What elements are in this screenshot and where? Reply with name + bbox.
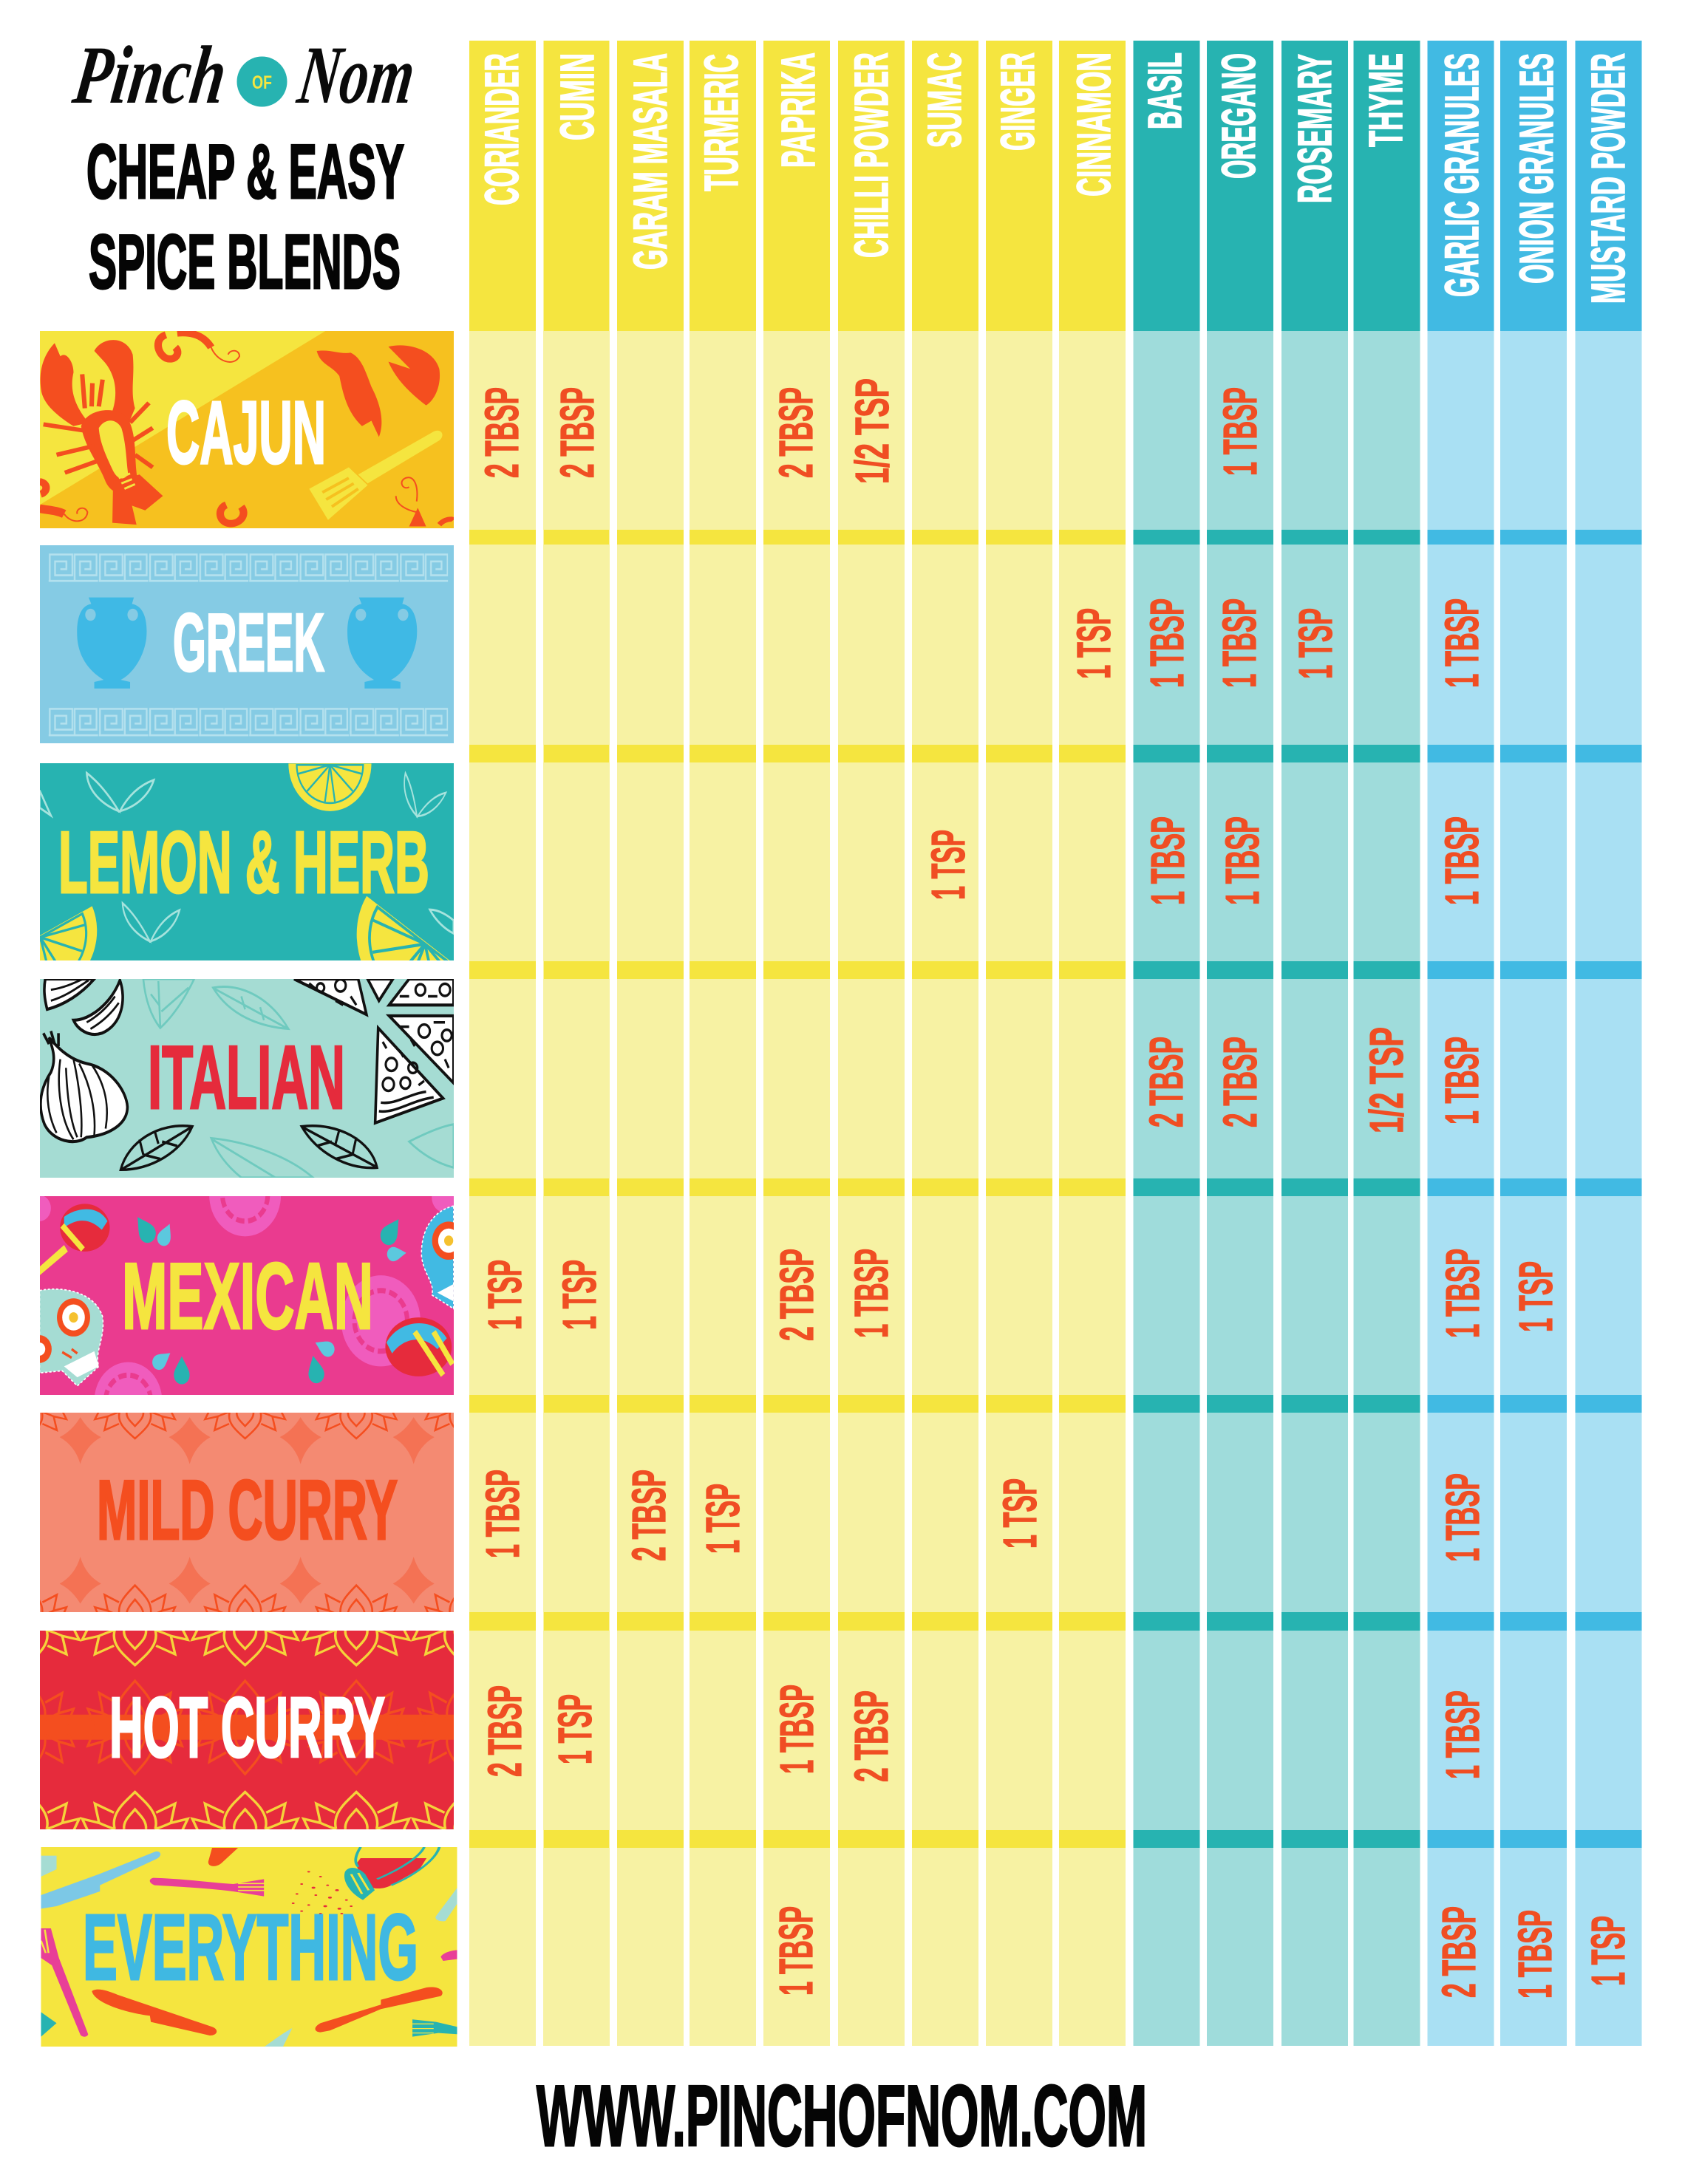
column: chilli powder: 1 TBSP	[845, 1249, 898, 1338]
column: chilli powder: 2 TBSP	[845, 1690, 898, 1782]
column: garlic granules	[1428, 41, 1494, 2046]
column: basil: 1 TBSP	[1140, 598, 1194, 688]
title: SPICE BLENDS	[89, 219, 401, 305]
stripe	[40, 1715, 455, 1740]
icon: shrimps	[40, 332, 454, 525]
column: paprika: 1 TBSP	[770, 1685, 823, 1774]
column: oregano: 2 TBSP	[1213, 1037, 1267, 1127]
logo badge: of	[236, 56, 287, 106]
column: cumin: 1 TSP	[548, 1694, 602, 1764]
icon: teal forks	[41, 2012, 457, 2037]
column: cumin: 1 TSP	[553, 1260, 606, 1330]
icon: maraca top	[40, 1204, 109, 1275]
icon: blue knife	[41, 1852, 160, 1908]
column: rosemary: 1 TSP	[1289, 608, 1342, 679]
logo badge: of: OF	[252, 72, 272, 93]
icon: pink flowers	[28, 1154, 458, 1440]
column: mustard powder	[1576, 41, 1642, 2046]
column: ginger: 1 TSP	[993, 1478, 1046, 1549]
icon: pink fork top	[150, 1878, 264, 1897]
icon: pale knives	[41, 1856, 457, 2047]
column: garam masala: 2 TBSP	[622, 1470, 675, 1561]
column: coriander: 1 TBSP	[476, 1470, 529, 1558]
column: chilli powder: 1/2 TSP	[845, 378, 899, 484]
pattern: greek key top	[48, 552, 448, 582]
banner: cajun	[40, 331, 454, 528]
column: cinnamon: 1 TSP	[1067, 608, 1120, 679]
column: garlic granules: 1 TBSP	[1435, 598, 1488, 688]
icon: pizza slices	[294, 979, 454, 1123]
column: garlic granules: 1 TBSP	[1436, 1249, 1489, 1338]
column: garlic granules: 1 TBSP	[1435, 1037, 1488, 1125]
column: mustard powder: 1 TSP	[1582, 1916, 1635, 1986]
column: thyme	[1354, 41, 1420, 2046]
icon: lobster	[41, 340, 163, 525]
ingredient columns	[469, 41, 1642, 2046]
banner: everything	[41, 1847, 457, 2047]
column: basil: 2 TBSP	[1140, 1037, 1193, 1127]
icon: orange knives	[92, 1848, 457, 2035]
pattern: orange lotus	[0, 1681, 513, 1774]
pattern: greek key bottom	[48, 706, 448, 737]
pattern: diamonds	[60, 1417, 435, 1603]
icon: lobster claws	[317, 345, 440, 437]
icon: spice speckles	[292, 1871, 353, 1914]
column: onion granules: 1 TSP	[1509, 1261, 1562, 1332]
banner: mild curry	[40, 1413, 454, 1612]
column: sumac	[912, 41, 978, 2046]
column: coriander: 1 TSP	[478, 1260, 531, 1330]
banner: mexican	[40, 1196, 454, 1395]
icon: skull left	[27, 1289, 103, 1386]
logo word: Nom: Nom	[292, 30, 421, 121]
column: garlic granules: 1 TBSP	[1435, 816, 1488, 905]
column: oregano: 1 TBSP	[1213, 387, 1267, 476]
footer website: WWW.PINCHOFNOM.COM	[537, 2067, 1147, 2164]
column: cumin	[543, 41, 610, 2046]
icon: skull right	[421, 1206, 466, 1308]
column: oregano	[1207, 41, 1273, 2046]
icon: garlic bulb	[41, 1031, 127, 1142]
column: coriander: 2 TBSP	[478, 1685, 531, 1777]
icon: pale leaves	[143, 979, 454, 1178]
icon: lemons	[0, 763, 486, 1049]
icon: garlic cloves	[44, 979, 123, 1034]
title: CHEAP & EASY	[86, 129, 404, 215]
column: turmeric: 1 TSP	[696, 1484, 749, 1554]
column: garlic granules: 2 TBSP	[1432, 1906, 1485, 1998]
pattern: yellow lotus	[0, 1625, 519, 1834]
column: basil: 1 TBSP	[1141, 816, 1194, 905]
logo word: Pinch: Pinch	[68, 30, 232, 121]
banner: greek	[40, 545, 454, 743]
column: cumin: 2 TBSP	[551, 387, 604, 478]
column: thyme: 1/2 TSP	[1360, 1027, 1413, 1133]
column: paprika: 1 TBSP	[769, 1906, 823, 1996]
title	[86, 129, 404, 305]
icon: pink fork left	[41, 1928, 88, 2037]
column: coriander	[469, 41, 536, 2046]
icon: salt shaker	[344, 1847, 439, 1900]
icon: spatula	[309, 431, 443, 520]
column: onion granules: 1 TBSP	[1508, 1910, 1562, 1999]
banner: lemon and herb	[40, 763, 454, 960]
column: rosemary	[1281, 41, 1348, 2046]
icon: black leaves	[120, 1126, 377, 1170]
banner: italian	[40, 979, 454, 1178]
column: coriander: 2 TBSP	[475, 387, 528, 478]
icon: vase right	[347, 598, 417, 689]
column: onion granules	[1500, 41, 1567, 2046]
column: paprika: 2 TBSP	[770, 1249, 823, 1341]
column: ginger	[986, 41, 1052, 2046]
column: paprika: 2 TBSP	[769, 387, 823, 478]
column: garlic granules: 1 TBSP	[1436, 1473, 1489, 1562]
column: paprika	[763, 41, 830, 2046]
column: garam masala	[617, 41, 684, 2046]
icon: vase left	[77, 598, 146, 689]
icon: maraca bottom	[385, 1317, 452, 1376]
column: turmeric	[690, 41, 756, 2046]
column: chilli powder	[838, 41, 905, 2046]
column: oregano: 1 TBSP	[1216, 816, 1269, 905]
column: sumac: 1 TSP	[922, 830, 975, 900]
column: basil	[1134, 41, 1200, 2046]
icon: drops	[131, 1212, 406, 1385]
column: oregano: 1 TBSP	[1213, 598, 1266, 688]
banner: hot curry	[40, 1631, 454, 1829]
column: cinnamon	[1059, 41, 1126, 2046]
pattern: lotus flowers	[0, 1408, 506, 1620]
logo: Pinch of Nom	[68, 30, 421, 121]
icon: leaves	[40, 773, 454, 941]
column: garlic granules: 1 TBSP	[1436, 1690, 1489, 1779]
